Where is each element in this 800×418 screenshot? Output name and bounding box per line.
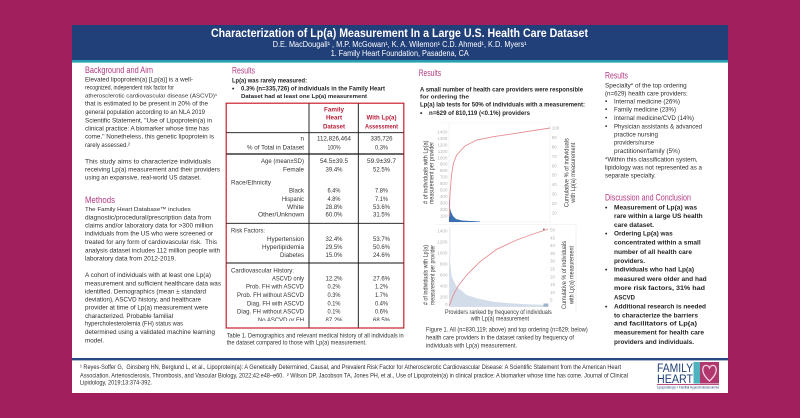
table: demographics and medical history: Black [289, 188, 305, 195]
chart: all providers: 70 [552, 154, 557, 159]
panel: methods: claims and/or laboratory data for >300 million [85, 223, 213, 230]
table: demographics and medical history: 32.4% [326, 236, 343, 243]
panel: background and aim: come." Nonetheless, this genetic lipoprotein is [85, 134, 215, 141]
panel: results, provider specialty: providers/nurse [614, 139, 654, 146]
panel: discussion and conclusion: concentrated within a small [614, 240, 701, 247]
panel: results, provider specialty: lipidology was not represented as a [605, 164, 702, 171]
panel: results, ordering providers: A small number of health care providers were responsible [420, 86, 583, 93]
panel: methods: analysis dataset includes 112 million people with [85, 247, 220, 254]
chart: all providers: 40 [552, 182, 557, 187]
chart: top ordering providers: with Lp(a) measurement [568, 246, 575, 305]
chart: all providers: 1000 [437, 155, 448, 160]
table: demographics and medical history: 60.0% [326, 212, 343, 219]
table: demographics and medical history: Dataset [323, 123, 346, 130]
table: demographics and medical history: Hispanic [282, 196, 304, 203]
references: ¹ Reyes-Soffer G, Ginsberg HN, Berglund L, et al., Lipoprotein(a): A Genetically Determined, Causal, and Prevalent Risk Factor for Atherosclerotic Cardiovascular Disease: A Scientific Statement from the American Heart [80, 364, 621, 371]
panel: background and aim: receiving Lp(a) measurement and their providers [85, 167, 221, 174]
header banner: 1. Family Heart Foundation, Pasadena, CA [331, 49, 469, 58]
panel: discussion and conclusion: measured were older and had [614, 276, 707, 283]
panel: results, provider specialty: practice nursing [614, 131, 658, 138]
panel: results, provider specialty: Internal medicine (26%) [614, 99, 680, 106]
chart: top ordering providers: 45 [550, 235, 556, 240]
table: demographics and medical history: 112,826,464 [317, 136, 351, 143]
panel: results, ordering providers: for ordering the [420, 94, 470, 100]
panel: methods: A cohort of individuals with at least one Lp(a) [85, 272, 211, 279]
chart: top ordering providers: # of individuals with Lp(a) [423, 245, 430, 305]
panel: discussion and conclusion: Individuals who had Lp(a) [614, 267, 694, 274]
panel: results, provider specialty: • [605, 99, 608, 106]
chart: all providers: 900 [440, 162, 448, 167]
panel: methods: diagnostic/procedural/prescription data from [85, 215, 211, 222]
panel: results, ordering providers: n=629 of 810,119 (<0.1%) providers [429, 110, 530, 117]
table: demographics and medical history: Prob. FH without ASCVD [237, 292, 304, 299]
panel: methods: Methods [85, 195, 116, 205]
chart: top ordering providers: 600 [440, 273, 448, 278]
table: demographics and medical history: 7.1% [375, 196, 388, 203]
table: demographics and medical history: 28.8% [326, 204, 343, 211]
table: demographics and medical history: 31.5% [373, 212, 390, 219]
panel: discussion and conclusion: • [605, 267, 608, 274]
panel: results, measurement rate: Dataset had at least one Lp(a) measurement [241, 94, 367, 100]
table: demographics and medical history: 0.2% [328, 284, 341, 291]
panel: methods: laboratory data from 2012-2019. [85, 255, 176, 262]
chart: all providers: Cumulative % of individuals [564, 138, 571, 207]
panel: discussion and conclusion: • [605, 303, 608, 310]
panel: methods [85, 195, 222, 344]
panel: results, provider specialty: Internal medicine/CVD (14%) [614, 115, 694, 122]
figure caption [426, 326, 588, 349]
table: demographics and medical history: Diag. FH with ASCVD [247, 300, 304, 307]
chart: all providers: # of individuals with Lp(a) [423, 140, 430, 206]
panel: methods: provider at time of Lp(a) measurement were [85, 305, 208, 312]
chart: top ordering providers: 1400 [437, 229, 448, 234]
table: demographics and medical history: 12.2% [326, 276, 343, 283]
chart: all providers: 20 [552, 201, 557, 206]
table: demographics and medical history: 0.6% [375, 309, 388, 316]
chart: all providers: 60 [552, 163, 557, 168]
table: demographics and medical history: Race/Ethnicity [231, 179, 272, 186]
panel: background and aim: This study aims to characterize individuals [85, 158, 212, 165]
panel: discussion and conclusion: care dataset. [614, 222, 654, 229]
panel: results, ordering providers: Results [419, 68, 442, 78]
panel: discussion and conclusion: Ordering Lp(a) was [614, 231, 673, 238]
panel: results, provider specialty: Results [605, 71, 628, 81]
chart: all providers: 600 [440, 181, 448, 186]
table: demographics and medical history: Cardiovascular History: [231, 267, 294, 274]
table: demographics and medical history: 53.6% [373, 204, 390, 211]
table: demographics and medical history: Prob. FH with ASCVD [246, 284, 304, 291]
table: demographics and medical history: Assessment [365, 123, 399, 130]
chart: all providers: 80 [552, 144, 557, 150]
table caption: Table 1. Demographics and relevant medical history of all individuals in [227, 332, 404, 339]
table: demographics and medical history: No ASCVD or FH [258, 317, 304, 324]
chart: all providers: 1400 [437, 129, 448, 134]
panel: discussion and conclusion: Measurement of Lp(a) was [614, 205, 698, 211]
panel: discussion and conclusion: Discussion and Conclusion [605, 192, 691, 202]
panel: background and aim: using an expansive, real-world US dataset. [85, 175, 201, 182]
references: Association. Arteriosclerosis, Thrombosis, and Vascular Biology, 2022;42:e48–e60. ² Wilson DP, Jacobson TA, Jones PH, et al., Use of Lipoprotein(a) in clinical practice: A biomarker whose time has come. Journal of Clinical [80, 372, 628, 379]
table: demographics and medical history: 6.4% [328, 188, 341, 195]
table: demographics and medical history: 87.2% [326, 317, 343, 324]
panel: discussion and conclusion: ASCVD [614, 294, 635, 301]
logo: Family Heart Foundation [657, 362, 719, 390]
table: demographics and medical history: 0.3% [375, 145, 388, 152]
panel: results, provider specialty: (n=629) health care providers: [605, 91, 688, 98]
chart: top ordering providers: 50 [550, 228, 556, 233]
panel: background and aim: recognized, independent risk factor for [85, 85, 175, 92]
panel: discussion and conclusion: number of all health care [614, 249, 692, 256]
panel: discussion and conclusion: and facilitators of Lp(a) [614, 321, 697, 328]
chart: all providers: 10 [552, 210, 557, 215]
panel: discussion and conclusion: measurement for health care [614, 330, 704, 337]
chart: top ordering providers: Cumulative % of individuals [561, 241, 568, 309]
panel: results, provider specialty: Specialty* of the top ordering [605, 83, 687, 90]
table: demographics and medical history: Hypertension [267, 236, 304, 243]
panel: discussion and conclusion: providers. [614, 258, 645, 265]
panel: discussion and conclusion: • [605, 231, 608, 238]
table: demographics and medical history: 100% [328, 145, 341, 152]
table: demographics and medical history: 27.6% [373, 276, 390, 283]
table: demographics and medical history: White [287, 204, 305, 211]
chart: top ordering providers [423, 224, 576, 323]
panel: results, provider specialty: separate specialty. [605, 173, 656, 180]
panel: discussion and conclusion: to characterize the barriers [614, 312, 698, 319]
panel: discussion and conclusion: Additional research is needed [614, 303, 706, 310]
table: demographics and medical history: Other/Unknown [258, 212, 305, 219]
table: demographics and medical history: 68.5% [373, 317, 390, 324]
table: demographics and medical history: Family [324, 107, 344, 114]
panel: background and aim: clinical practice: A biomarker whose time has [85, 125, 210, 132]
panel: methods: individuals from the US who were screened or [85, 231, 214, 238]
table: demographics and medical history: % of Total in Dataset [247, 145, 304, 152]
chart: all providers: 300 [440, 200, 448, 206]
chart: all providers: 800 [440, 168, 448, 173]
chart: top ordering providers: Providers ranked by frequency of individuals [445, 309, 552, 316]
table: demographics and medical history: 0.1% [328, 300, 341, 307]
panel: results, ordering providers [419, 68, 585, 117]
panel: methods: treated for any form of cardiovascular risk. This [85, 239, 218, 246]
header banner: Characterization of Lp(a) Measurement In a Large U.S. Health Care Dataset [211, 27, 588, 40]
table: demographics and medical history: Age (mean±SD) [261, 158, 304, 165]
panel: methods: hypercholesterolemia (FH) status was [85, 321, 184, 328]
panel: results, measurement rate: Results [232, 66, 255, 76]
chart: all providers: 90 [552, 135, 557, 140]
panel: background and aim: atherosclerotic cardiovascular disease (ASCVD)¹ [85, 93, 217, 99]
panel: background and aim: Scientific Statement, "Use of Lipoprotein(a) in [85, 117, 212, 124]
table: demographics and medical history: 53.7% [373, 236, 390, 243]
table: demographics and medical history: Risk Factors: [231, 227, 265, 234]
table: demographics and medical history: 54.5±39.5 [320, 158, 348, 165]
panel: results, provider specialty: • [605, 123, 608, 130]
panel: discussion and conclusion: providers and individuals. [614, 339, 694, 346]
figure caption: individuals with Lp(a) measurement. [426, 342, 517, 349]
table: demographics and medical history: 29.5% [326, 244, 343, 251]
table: demographics and medical history: With Lp(a) [366, 115, 396, 122]
table: demographics and medical history: 0.1% [328, 309, 341, 316]
chart: top ordering providers: 40 [550, 243, 556, 248]
table caption: the dataset compared to those with Lp(a) measurement. [227, 340, 367, 347]
chart: top ordering providers: 35 [550, 251, 556, 256]
panel: results, provider specialty [605, 71, 702, 180]
panel: background and aim: rarely assessed.² [85, 142, 131, 149]
references: Lipidology, 2019;13:374-392. [80, 380, 152, 387]
panel: background and aim: general population according to an NLA 2019 [85, 109, 205, 116]
panel: background and aim: Background and Aim [85, 65, 153, 75]
panel: methods: deviation), ASCVD history, and healthcare [85, 296, 201, 303]
panel: methods: determined using a validated machine learning [85, 329, 215, 336]
logo: Family Heart Foundation: Lipoprotein(a) + Familial Hypercholesterolemia [657, 386, 719, 390]
chart: all providers: 1200 [437, 142, 448, 147]
panel: methods: characterized. Probable familial [85, 313, 173, 320]
panel: discussion and conclusion [605, 192, 707, 346]
chart: top ordering providers: 0 [445, 302, 448, 307]
panel: discussion and conclusion: more risk factors, 31% had [614, 285, 705, 292]
logo: Family Heart Foundation: FAMILY [657, 363, 693, 375]
chart: top ordering providers: 15 [550, 282, 556, 287]
table: demographics and medical history: 1.2% [375, 284, 388, 291]
chart: top ordering providers: 1000 [437, 251, 448, 256]
table: demographics and medical history: 335,726 [370, 136, 393, 143]
panel: results, measurement rate: 0.3% (n=335,726) of individuals in the Family Heart [241, 86, 386, 93]
chart: top ordering providers: 5 [550, 298, 553, 303]
header banner: D.E. MacDougall¹ , M.P. McGowan¹, K. A. Wilemon¹ C.D. Ahmed¹, K.D. Myers¹ [273, 40, 527, 49]
table: demographics and medical history: Diabetes [280, 252, 304, 259]
poster [72, 25, 728, 393]
table: demographics and medical history: Diag. FH without ASCVD [237, 309, 304, 316]
logo: Family Heart Foundation: HEART [657, 374, 693, 386]
chart: top ordering providers: 25 [550, 267, 556, 272]
panel: background and aim: that is estimated to be present in 20% of the [85, 101, 208, 108]
chart: top ordering providers: measurement per provider [430, 245, 437, 305]
panel: results, ordering providers: Lp(a) lab tests for 50% of individuals with a measurement: [420, 102, 585, 109]
panel: methods: identified. Demographics (mean ± standard [85, 288, 206, 295]
panel: results, provider specialty: • [605, 115, 608, 122]
chart: all providers [423, 123, 577, 222]
panel: results, provider specialty: *Within this classification system, [605, 156, 698, 163]
chart: all providers: 500 [440, 188, 448, 193]
header banner [72, 25, 728, 63]
table: demographics and medical history: 24.6% [373, 252, 390, 259]
panel: methods: measurement and sufficient healthcare data was [85, 280, 222, 287]
chart: all providers: 1300 [437, 136, 448, 141]
table: demographics and medical history: 52.5% [373, 166, 390, 173]
table: demographics and medical history [226, 103, 404, 328]
table: demographics and medical history: n [300, 136, 304, 143]
chart: top ordering providers: 30 [550, 259, 556, 264]
panel: results, provider specialty: Physician assistants & advanced [614, 123, 702, 130]
figure caption: health care providers in the dataset ranked by frequency of [426, 334, 574, 341]
table: demographics and medical history: 15.0% [326, 252, 343, 259]
panel: discussion and conclusion: • [605, 204, 608, 211]
table caption [227, 332, 404, 347]
table: demographics and medical history: ASCVD only [272, 276, 305, 283]
chart: all providers: 400 [440, 194, 448, 199]
chart: all providers: 30 [552, 192, 557, 196]
figure caption: Figure 1. All (n=830,119; above) and top ordering (n=629; below) [426, 326, 588, 333]
panel: background and aim [85, 65, 221, 182]
chart: top ordering providers: 1200 [437, 240, 448, 245]
panel: results, measurement rate: Lp(a) was rarely measured: [232, 77, 307, 84]
chart: all providers: 200 [440, 207, 448, 212]
table: demographics and medical history: 7.8% [375, 188, 388, 195]
panel: background and aim: Elevated lipoprotein(a) [Lp(a)] is a well- [85, 77, 193, 84]
panel: results, provider specialty: Family medicine (23%) [614, 107, 676, 114]
chart: top ordering providers: 10 [550, 290, 556, 295]
chart: all providers: 100 [440, 213, 448, 218]
chart: all providers: with Lp(a) measurement [570, 142, 577, 204]
table: demographics and medical history: 0.4% [375, 300, 388, 307]
table: demographics and medical history: Female [283, 166, 304, 173]
chart: top ordering providers: 400 [440, 283, 448, 288]
chart: top ordering providers: 20 [550, 274, 556, 279]
table: demographics and medical history: Heart [326, 115, 343, 122]
panel: results, provider specialty: • [605, 107, 608, 114]
panel: results, ordering providers: • [420, 110, 423, 117]
table: demographics and medical history: 39.4% [326, 166, 343, 173]
white poster panel [72, 25, 728, 393]
panel: results, measurement rate: • [232, 86, 235, 93]
chart: all providers: 100 [552, 126, 560, 131]
table: demographics and medical history: 50.6% [373, 244, 390, 251]
table: demographics and medical history: 4.8% [328, 196, 341, 203]
panel: discussion and conclusion: rare within a large US health [614, 213, 703, 220]
panel: methods: The Family Heart Database™ includes [85, 207, 191, 213]
chart: all providers: 700 [440, 175, 448, 180]
table: demographics and medical history: 0.3% [328, 292, 341, 299]
table: demographics and medical history: 59.9±39.7 [367, 158, 397, 165]
chart: all providers: measurement per provider [429, 142, 436, 204]
references [80, 364, 628, 387]
chart: top ordering providers: 200 [440, 294, 448, 299]
panel: methods: model. [85, 337, 104, 344]
chart: all providers: 1100 [438, 149, 448, 154]
table: demographics and medical history: Hyperlipidemia [262, 244, 304, 251]
panel: results, provider specialty: practitioner/family (5%) [614, 148, 680, 155]
table: demographics and medical history: 1.7% [375, 292, 388, 299]
chart: top ordering providers: 800 [440, 262, 448, 267]
panel: results, measurement rate [232, 66, 386, 100]
chart: all providers: 50 [552, 173, 557, 178]
chart: top ordering providers: with Lp(a) measurement [470, 316, 529, 323]
